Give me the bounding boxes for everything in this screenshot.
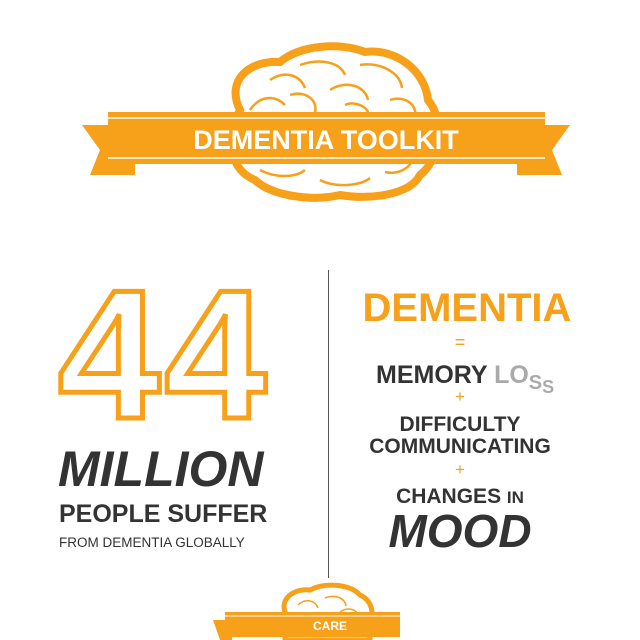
text: MILLION: MILLION bbox=[58, 441, 264, 497]
text: PEOPLE SUFFER: PEOPLE SUFFER bbox=[59, 500, 267, 528]
symbol: plus: + bbox=[455, 387, 465, 406]
symbol: plus: + bbox=[455, 460, 465, 479]
stat: 44: 44 bbox=[58, 251, 271, 457]
panel: dementia equation bbox=[363, 286, 571, 557]
symbol: equals: = bbox=[455, 332, 465, 352]
ribbon: CARE: CARE bbox=[313, 619, 347, 633]
ribbon: CARE bbox=[213, 612, 400, 640]
text: difficulty communicating bbox=[369, 413, 551, 458]
text: MOOD: MOOD bbox=[388, 505, 532, 557]
header: brain with ribbon bbox=[82, 42, 570, 202]
icon: brain bbox=[232, 46, 438, 198]
heading: DEMENTIA: DEMENTIA bbox=[363, 286, 571, 330]
ribbon bbox=[82, 112, 570, 175]
text: memory loss: MEMORY LOSS bbox=[376, 361, 554, 397]
icon: small brain bbox=[284, 585, 372, 640]
divider bbox=[328, 270, 329, 578]
title: DEMENTIA TOOLKIT bbox=[193, 125, 459, 155]
text: difficulty communicating: COMMUNICATING bbox=[369, 435, 551, 458]
text: changes in: CHANGES IN bbox=[396, 485, 524, 508]
text: difficulty communicating: DIFFICULTY bbox=[400, 413, 520, 436]
text: FROM DEMENTIA GLOBALLY: FROM DEMENTIA GLOBALLY bbox=[59, 535, 245, 550]
bottom: care brain ribbon bbox=[213, 582, 400, 640]
